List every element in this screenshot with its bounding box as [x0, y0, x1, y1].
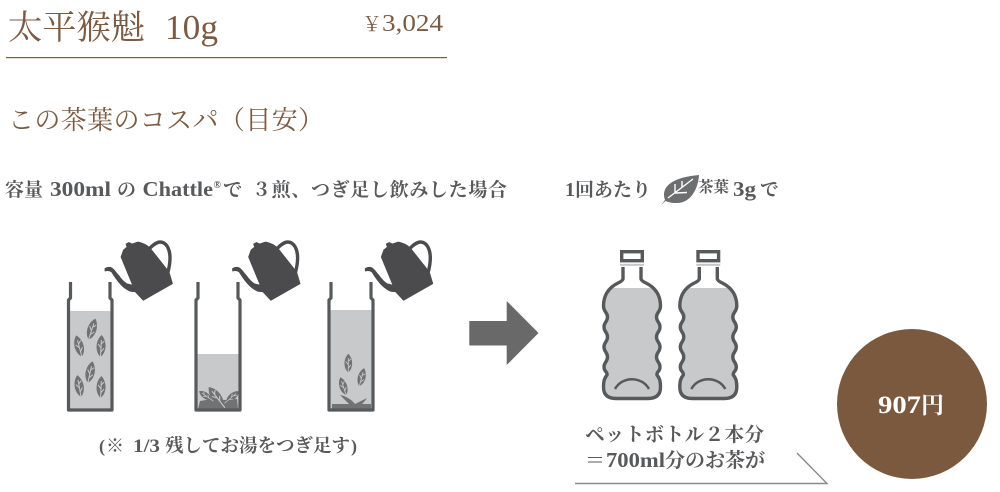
left subheading: ® [214, 180, 222, 191]
price: ￥ [362, 14, 382, 36]
bottle 1 [604, 252, 660, 398]
title rule [6, 57, 447, 58]
caption under beakers: ( [99, 436, 105, 457]
caption under beakers: 1/3 [133, 436, 160, 457]
price: 3,024 [382, 11, 443, 37]
right subheading: で [760, 181, 779, 201]
right subheading [565, 175, 779, 205]
kettle 3 [365, 242, 433, 300]
left subheading: で [223, 180, 242, 201]
kettle 2 [233, 242, 300, 300]
price circle: 907 [878, 392, 921, 419]
bottle caption [585, 424, 765, 472]
kettle 1 [105, 242, 172, 300]
title: 10g [165, 8, 218, 47]
price circle: 円 [921, 393, 944, 418]
section heading: この茶葉のコスパ（目安） [8, 106, 324, 135]
left subheading: の [117, 180, 136, 201]
right subheading: 3g [733, 177, 757, 201]
bottle caption: 700ml [606, 448, 665, 472]
title: 太平猴魁 [8, 9, 145, 47]
left subheading: ３煎、つぎ足し飲みした場合 [252, 179, 507, 201]
beaker 3 with few leaves [329, 282, 373, 410]
left subheading [5, 177, 507, 201]
right subheading: 茶葉 [698, 177, 729, 196]
left subheading: 容量 [5, 179, 43, 201]
caption under beakers: ) [351, 436, 357, 457]
bottle caption: ペットボトル２本分 [585, 424, 764, 446]
beaker 2 with settled leaves [196, 282, 241, 411]
price circle [837, 329, 987, 479]
bottle caption: ＝ [585, 450, 605, 472]
caption under beakers [99, 435, 357, 457]
right subheading: 回あたり [575, 179, 651, 201]
right subheading: 1 [565, 179, 575, 201]
title [8, 8, 218, 47]
callout pointer line [575, 453, 827, 484]
bottle caption: 分のお茶が [665, 448, 765, 472]
bottle 2 [680, 252, 737, 398]
caption under beakers: 残してお湯をつぎ足す [165, 435, 350, 457]
caption under beakers: ※ [106, 436, 124, 456]
price [362, 11, 443, 37]
arrow [469, 301, 538, 365]
left subheading: Chattle [142, 177, 213, 201]
icon: tea leaf [661, 175, 699, 205]
beaker 1 with leaves [68, 282, 112, 410]
left subheading: 300ml [50, 177, 111, 201]
